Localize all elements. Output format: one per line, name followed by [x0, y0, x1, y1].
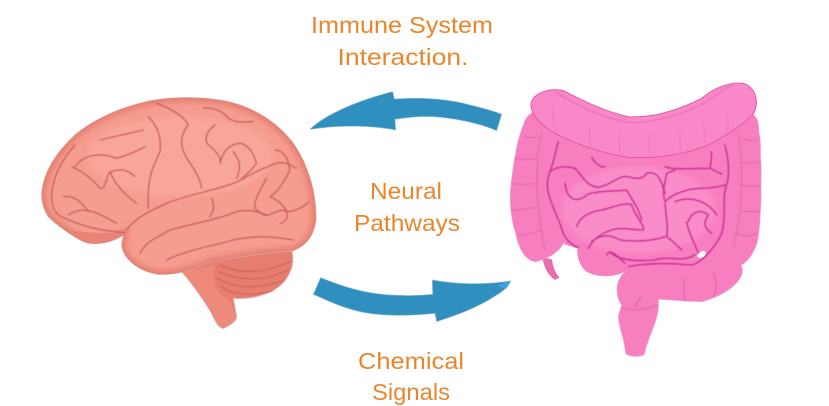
- small intestine highlight: [562, 167, 715, 253]
- arrow: brain to gut: [313, 278, 511, 322]
- brain stem and cerebellum: [182, 250, 293, 328]
- edge shading and lower frontal lobe: [42, 98, 316, 274]
- label: Neural Pathways: Pathways: [354, 210, 460, 236]
- soft highlight: [87, 117, 273, 197]
- icon: intestines: [510, 83, 761, 356]
- arrow: gut to brain: [311, 92, 502, 131]
- colon folds: [553, 84, 733, 156]
- label: Chemical Signals: Chemical: [358, 348, 464, 374]
- sulci: [52, 103, 309, 260]
- icon: brain: [42, 98, 316, 328]
- label: Neural Pathways: [354, 178, 460, 236]
- heading: Immune System Interaction: Interaction.: [338, 44, 468, 70]
- label: Chemical Signals: Signals: [372, 379, 450, 405]
- label: Neural Pathways: Neural: [370, 178, 442, 204]
- heading: Immune System Interaction: [311, 12, 493, 70]
- gut silhouette: [510, 83, 761, 356]
- intestine folds: [547, 142, 728, 267]
- label: Chemical Signals: [358, 348, 464, 405]
- heading: Immune System Interaction: Immune System: [311, 12, 493, 38]
- transverse colon: [531, 83, 756, 158]
- colon segment lines: [511, 133, 761, 250]
- cerebrum: [42, 98, 316, 274]
- appendix: [543, 257, 559, 279]
- gap between loops: [697, 251, 706, 258]
- sigmoid colon and rectum detail: [621, 273, 716, 310]
